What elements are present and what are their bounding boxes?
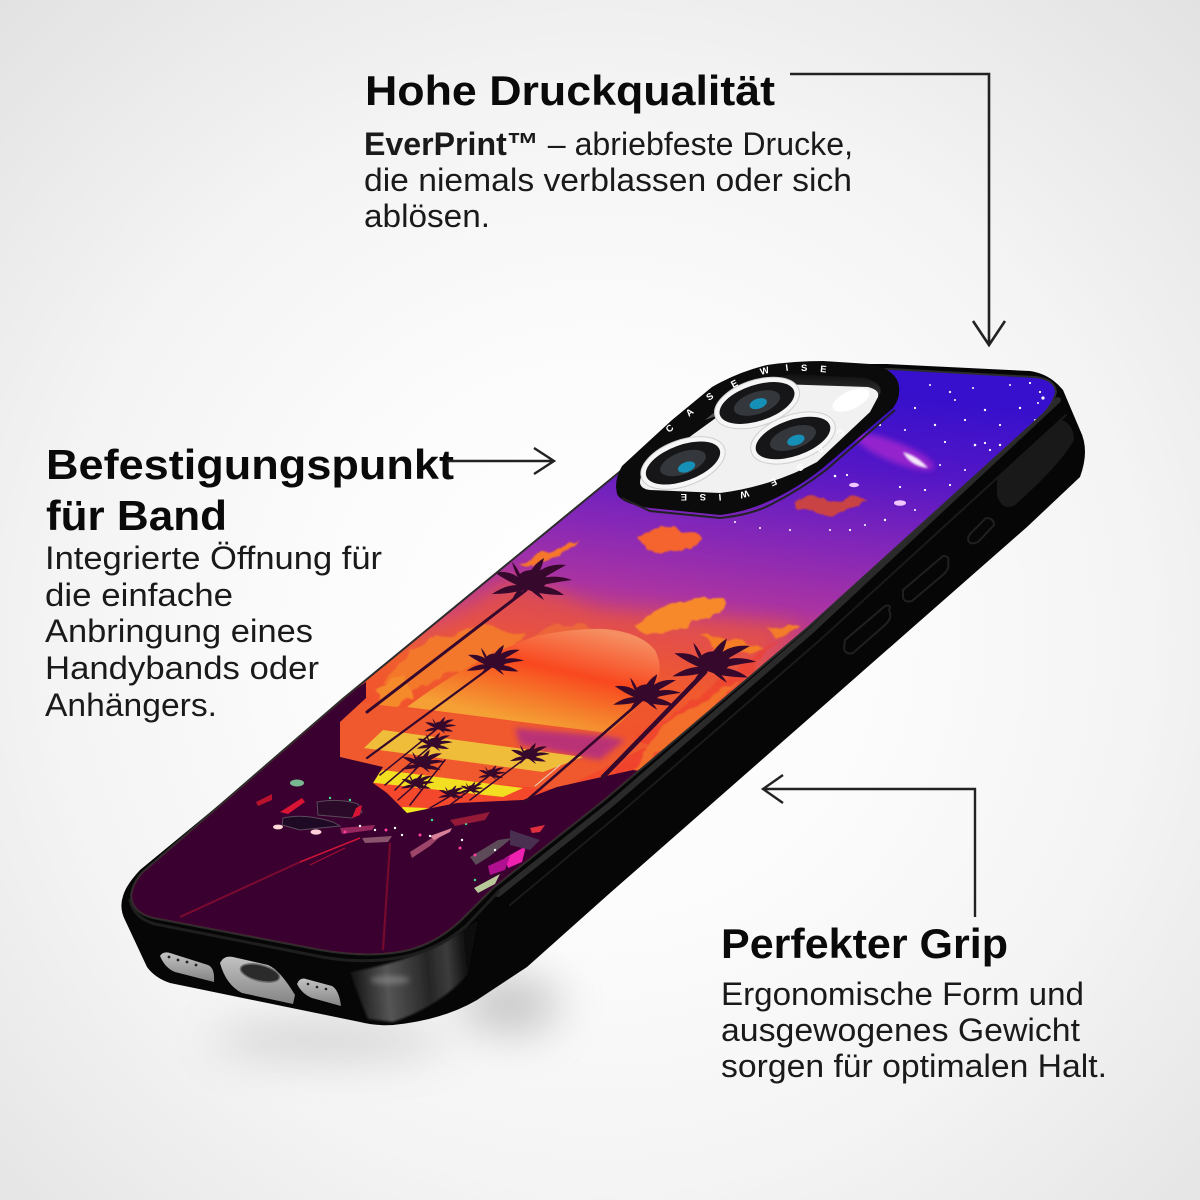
heading [46, 441, 454, 539]
side buttons [844, 518, 994, 653]
description [364, 126, 853, 234]
heading: Hohe Druckqualität [365, 67, 775, 114]
phone with case [100, 350, 1100, 1025]
window [640, 384, 878, 493]
case body [121, 364, 1085, 1025]
camera island [616, 361, 899, 518]
description: ablösen. [364, 198, 490, 234]
lens right [744, 402, 842, 474]
callout: grip [721, 920, 1107, 1084]
right speaker grille [297, 979, 341, 1006]
heading: Befestigungspunkt [46, 441, 454, 488]
island frame [616, 361, 899, 515]
callout: print quality [364, 67, 853, 234]
brand text lower: CASEWISE [681, 426, 846, 502]
arrow: strap attachment [447, 448, 554, 474]
brand text upper: CASEWISE [664, 363, 827, 435]
description: sorgen für optimalen Halt. [721, 1048, 1107, 1084]
description: Ergonomische Form und [721, 976, 1084, 1012]
comet [849, 427, 938, 506]
arrow: grip [763, 775, 975, 917]
side grip panel [997, 420, 1074, 507]
heading: Perfekter Grip [721, 920, 1008, 967]
palm trees [367, 558, 756, 808]
stars [734, 382, 1045, 531]
description: EverPrint™ – abriebfeste Drucke, [364, 126, 853, 162]
glow behind moon [432, 568, 800, 770]
description: die niemals verblassen oder sich [364, 162, 852, 198]
heading: für Band [46, 492, 227, 539]
printed artwork [132, 370, 1055, 954]
moon [407, 629, 660, 733]
charging port [220, 957, 295, 1004]
horizon bands [340, 700, 650, 820]
description: die einfache [45, 577, 233, 613]
frame highlight [622, 410, 895, 518]
description [721, 976, 1107, 1084]
night street [132, 682, 638, 954]
description: Anbringung eines [45, 613, 313, 649]
corner highlight [370, 976, 410, 984]
inner lip [705, 374, 881, 420]
description: ausgewogenes Gewicht [721, 1012, 1080, 1048]
street lights and cars [180, 780, 545, 950]
case glossy corner [350, 920, 478, 1022]
arrow: print quality [790, 74, 1005, 345]
clouds [375, 499, 864, 785]
callout: strap attachment [45, 441, 454, 723]
description: Integrierte Öffnung für [45, 540, 382, 576]
description: Handybands oder [45, 650, 319, 686]
ground shadow [210, 977, 560, 1058]
screen rim [132, 370, 1055, 953]
sky [132, 370, 1055, 954]
lens left [634, 426, 732, 500]
flash [829, 383, 873, 417]
lens top [708, 368, 806, 438]
description: Anhängers. [45, 687, 217, 723]
side rim bands [130, 400, 1066, 961]
description [45, 540, 382, 723]
left speaker grille [160, 952, 214, 982]
